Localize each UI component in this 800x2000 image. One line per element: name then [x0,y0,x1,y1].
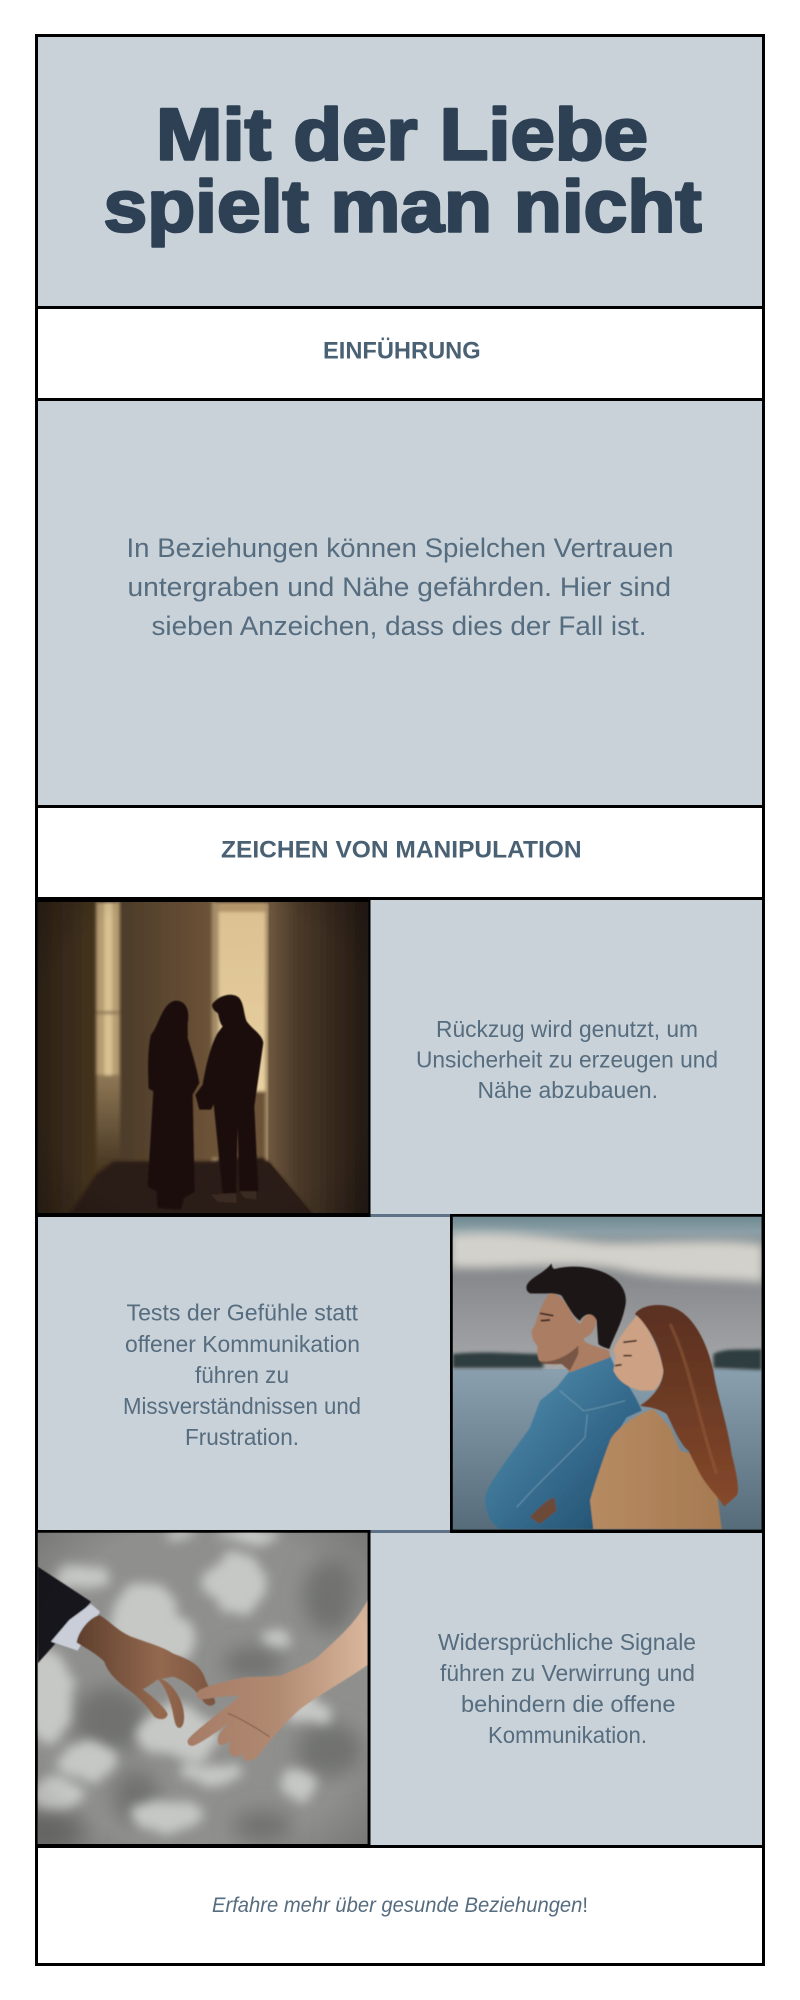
photo: couple silhouettes in hallway [36,898,369,1215]
photo: couple by the lake [450,1217,763,1532]
call to action: Erfahre mehr über gesunde Beziehungen! [212,1893,588,1917]
photo: reaching hands [18,1527,368,1850]
text block: introduction: untergraben und Nähe gefährden. Hier sind [128,572,671,602]
photo divider accents [370,1214,450,1533]
panel: footer [38,1848,762,1963]
text block: contradictory signals: Widersprüchliche Signale [438,1629,696,1655]
title: Mit der Liebe [156,94,648,176]
text block: testing feelings: führen zu [195,1362,289,1388]
text block: introduction: In Beziehungen können Spielchen Vertrauen [126,533,674,563]
panel: row 2 text [38,1217,450,1530]
text block: testing feelings [123,1300,361,1450]
text block: testing feelings: Missverständnissen und [123,1393,361,1419]
text block: contradictory signals [438,1629,696,1748]
text block: withdrawal: Nähe abzubauen. [478,1077,658,1103]
text block: testing feelings: offener Kommunikation [125,1331,360,1357]
text block: contradictory signals: behindern die offene [461,1691,676,1717]
text block: withdrawal [416,1016,718,1103]
panel: introduction text [38,401,762,805]
text block: testing feelings: Frustration. [185,1424,299,1450]
panel: introduction heading [38,309,762,398]
title: spielt man nicht [104,166,702,248]
text block: withdrawal: Unsicherheit zu erzeugen und [416,1046,718,1072]
text block: contradictory signals: Kommunikation. [488,1722,647,1748]
text block: introduction: sieben Anzeichen, dass dies der Fall ist. [152,611,646,641]
woman [590,1409,722,1529]
panel: row 1 text [370,900,762,1214]
text block: contradictory signals: führen zu Verwirrung und [440,1660,695,1686]
panel: row 3 text [370,1533,762,1845]
text block: testing feelings: Tests der Gefühle statt [126,1300,359,1326]
heading: Zeichen von Manipulation: ZEICHEN VON MANIPULATION [221,836,582,864]
text block: withdrawal: Rückzug wird genutzt, um [436,1016,698,1042]
heading: Einführung: EINFÜHRUNG [323,338,481,364]
title [104,94,702,248]
panel: title [38,37,762,306]
panel: signs heading [38,808,762,897]
text block: introduction [126,533,674,641]
man [485,1356,642,1529]
